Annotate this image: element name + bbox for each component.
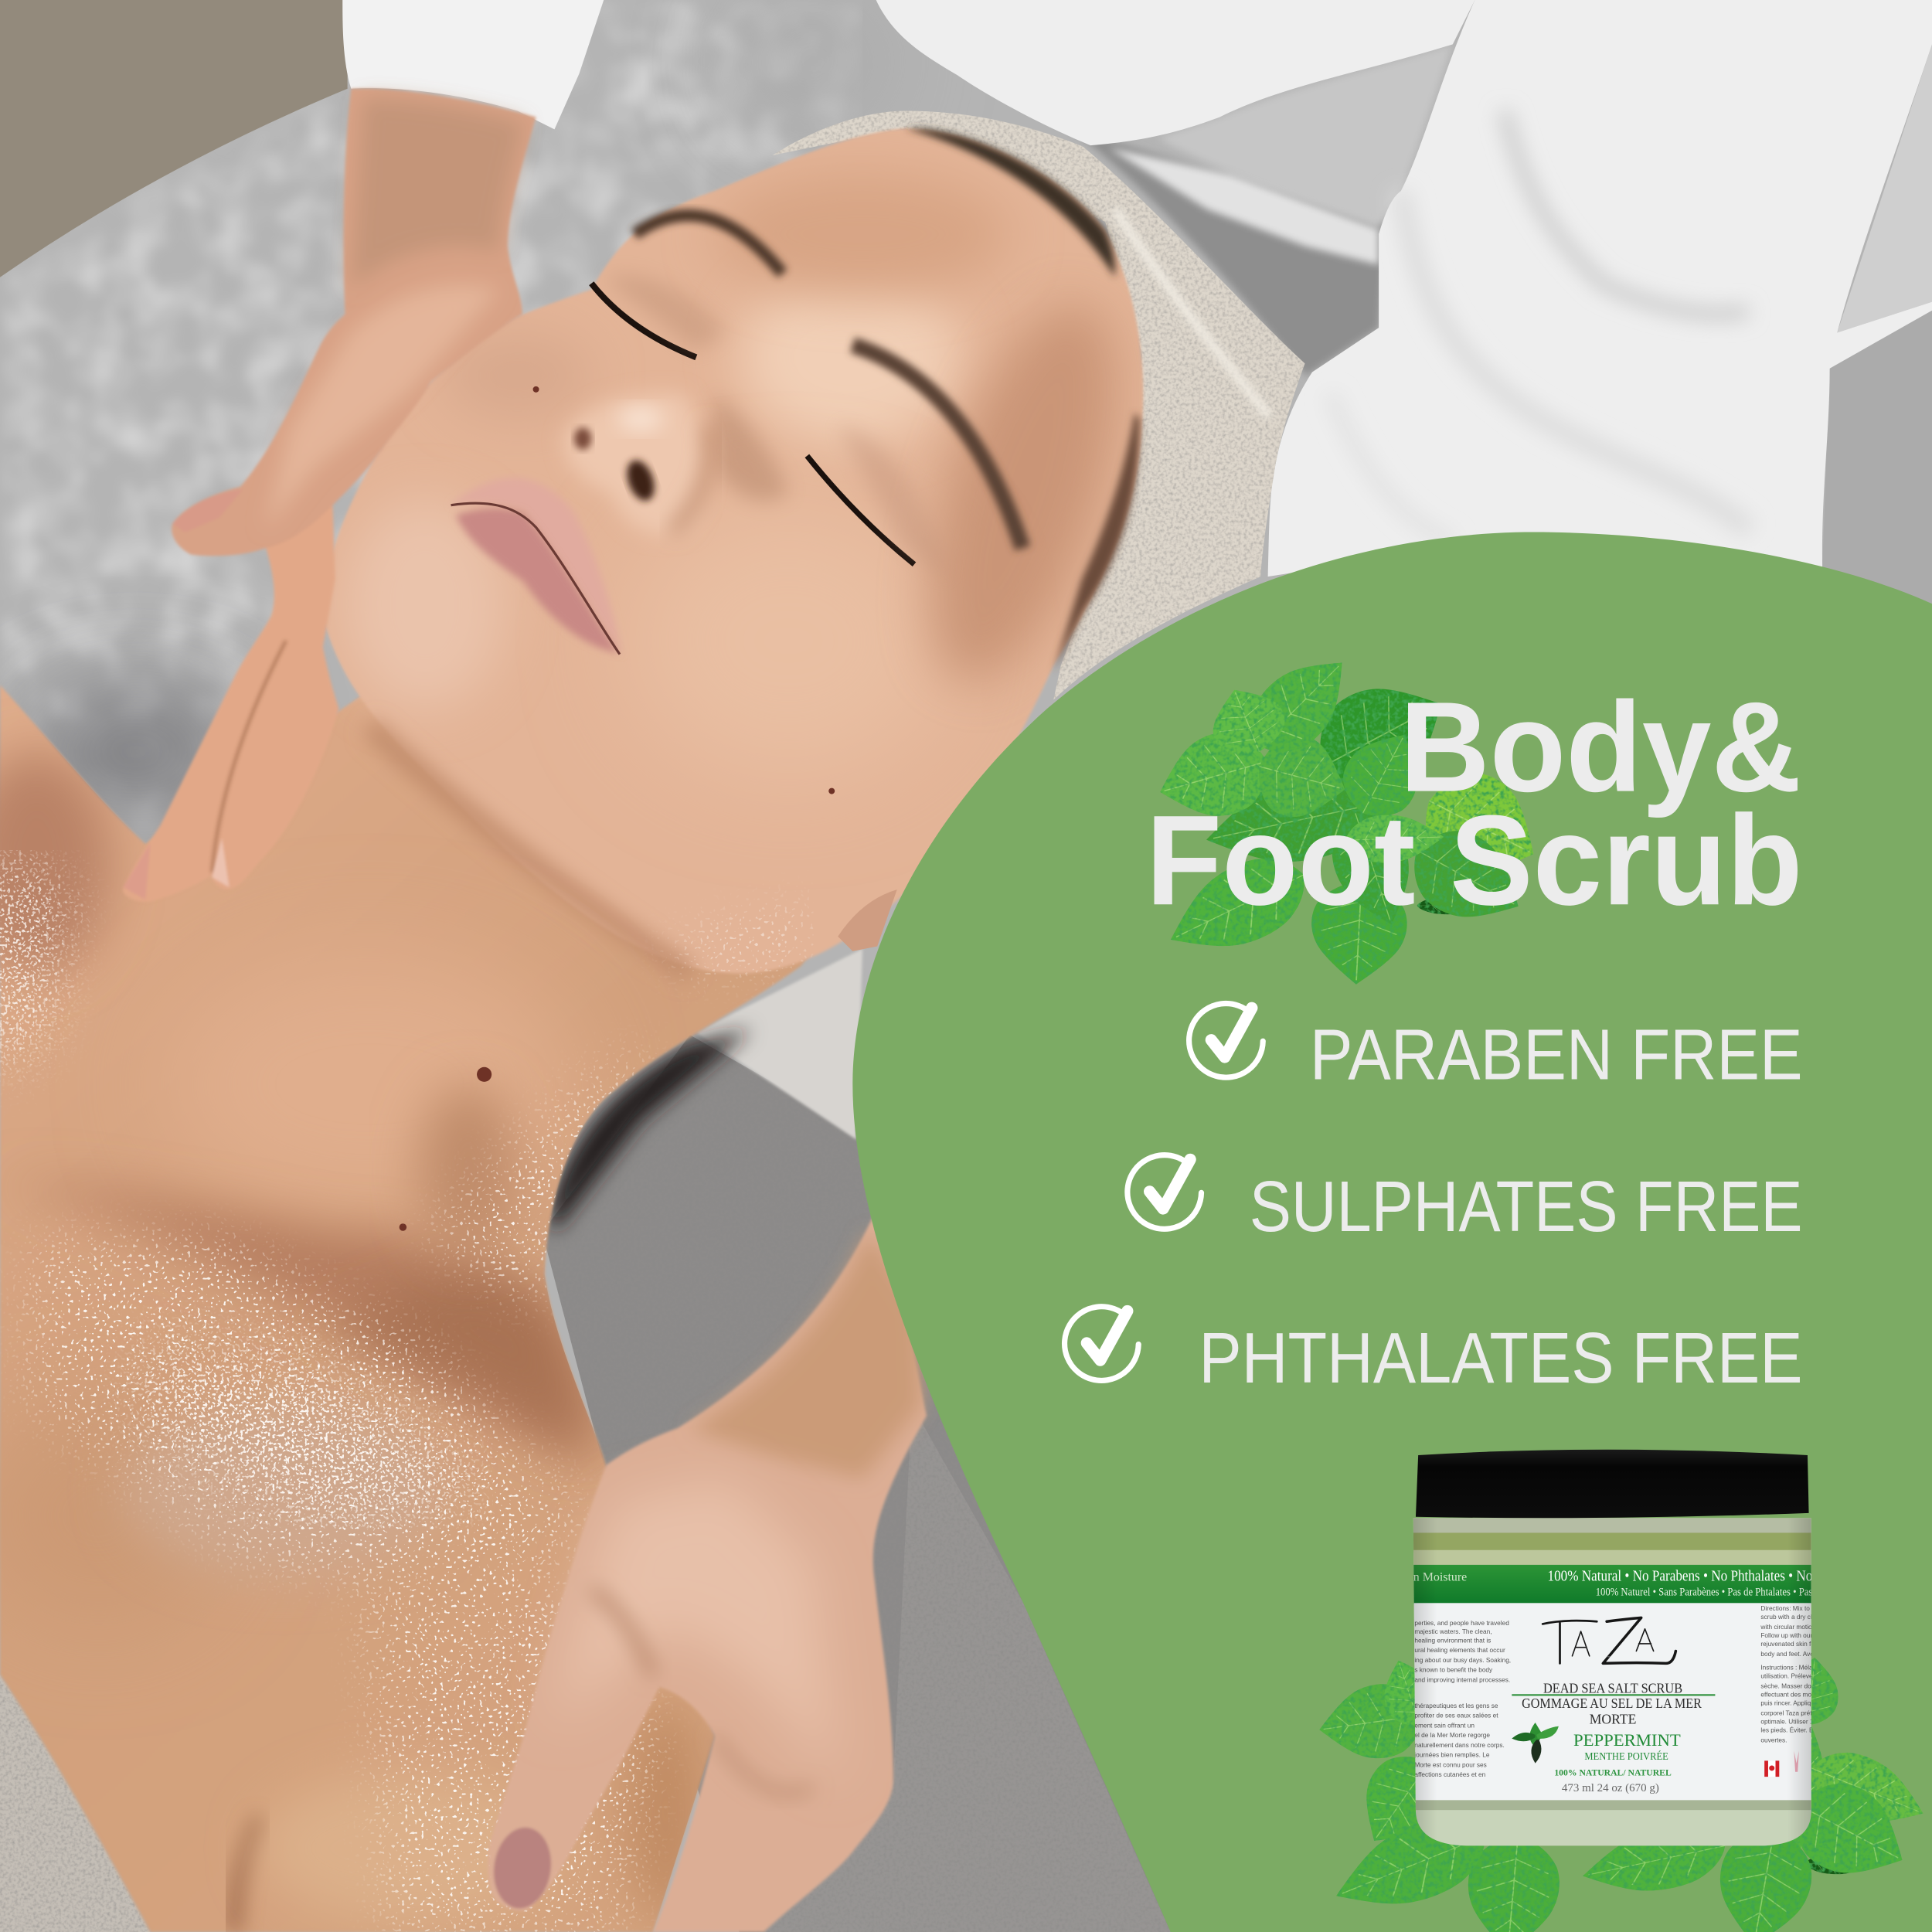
- band text left: n Moisture: [1413, 1571, 1467, 1584]
- left column copy: healing environment that is: [1414, 1636, 1491, 1644]
- coat: right grey backdrop: [1822, 44, 1932, 604]
- icon: canada flag: [1764, 1760, 1779, 1777]
- towel: mottling: [0, 0, 862, 850]
- label: PARABEN FREE: [1310, 1015, 1803, 1095]
- band text line two: 100% Naturel • Sans Parabènes • Pas de Phtalates • Pas: [1596, 1587, 1813, 1599]
- right column copy: with circular motion after bathing.: [1760, 1623, 1855, 1631]
- claim: phthalates free: [1065, 1307, 1803, 1398]
- icon: cruelty free rabbit: [1794, 1751, 1799, 1772]
- claim: paraben free: [1189, 1004, 1803, 1095]
- icon: check circle: [1189, 1004, 1263, 1077]
- jar edge shading: [1413, 1518, 1811, 1849]
- left column copy: s known to benefit the body: [1414, 1666, 1493, 1674]
- white label: [1413, 1603, 1811, 1800]
- product name french: GOMMAGE AU SEL DE LA MER: [1522, 1696, 1702, 1711]
- divider: [1512, 1694, 1715, 1696]
- left column copy: thérapeutiques et les gens se: [1414, 1702, 1498, 1709]
- forearm shade: [690, 1232, 922, 1478]
- flavor name french: MENTHE POIVRÉE: [1584, 1750, 1668, 1762]
- left column copy: ing about our busy days. Soaking,: [1414, 1656, 1511, 1664]
- towel under head: [696, 949, 862, 1140]
- left column copy: ement sain offrant un: [1414, 1721, 1475, 1729]
- panel: green curved background: [852, 532, 1932, 1932]
- label: SULPHATES FREE: [1250, 1166, 1803, 1247]
- claim: sulphates free: [1128, 1155, 1803, 1247]
- product name french second line: MORTE: [1590, 1712, 1636, 1727]
- lid: [1416, 1450, 1809, 1518]
- right column copy: sèche. Masser doucement le gommage: [1760, 1682, 1873, 1689]
- salt grains: [0, 850, 813, 1932]
- right eye: [807, 456, 914, 564]
- net weight: 473 ml 24 oz (670 g): [1562, 1782, 1659, 1794]
- fingernail thumb: [172, 489, 243, 532]
- left column copy: perties, and people have traveled: [1414, 1619, 1509, 1627]
- bottom scrub grain shading: [1413, 1800, 1811, 1810]
- right column copy: rejuvenated skin for optimum results: [1760, 1640, 1863, 1648]
- left brow: [634, 216, 782, 274]
- right column copy: effectuant des mouvements circulaires: [1760, 1690, 1870, 1698]
- headband: [773, 111, 1304, 700]
- backdrop: beige floor: [0, 0, 348, 277]
- right column copy: les pieds. Éviter. Exfoliant sur votre: [1760, 1726, 1861, 1734]
- ear: [838, 889, 897, 951]
- coat: main body: [1268, 0, 1932, 577]
- right brow: [852, 345, 1022, 549]
- towel: lower grey: [543, 1035, 1171, 1932]
- jar body: [1413, 1518, 1811, 1845]
- thumb highlight: [265, 285, 499, 530]
- body: neck, chest and shoulder: [0, 685, 862, 1932]
- nose: [564, 393, 710, 535]
- coat: dark fold shadow: [1072, 129, 1386, 376]
- right column copy: ouvertes.: [1760, 1736, 1787, 1743]
- skin shading: [0, 172, 1154, 1932]
- hand shading: [554, 1478, 838, 1787]
- masseuse upper hand: [123, 89, 536, 902]
- wrist and thumb: [172, 89, 536, 556]
- flavor name: PEPPERMINT: [1573, 1730, 1681, 1750]
- headband fold: [1115, 209, 1269, 417]
- right column copy: corporel Taza préfere sur une peau: [1760, 1709, 1861, 1716]
- wrist shade: [351, 99, 524, 290]
- right column copy: body and feet. Avoid using on open: [1760, 1650, 1861, 1658]
- right column copy: scrub with a dry clean spoon. Gently: [1760, 1613, 1865, 1621]
- right column copy: optimale. Utiliser 1 à 2 fois par sem: [1760, 1718, 1861, 1726]
- title line two: Foot Scrub: [1146, 789, 1803, 932]
- left column copy: affections cutanées et en: [1414, 1770, 1486, 1778]
- masseuse lower arm and hand: [488, 1213, 927, 1932]
- right column copy: puis rincer. Appliquez ensuite notre: [1760, 1699, 1860, 1707]
- salt grains: denser core: [0, 850, 493, 1528]
- towel: wrap at bottom left: [0, 1675, 151, 1932]
- hair: [906, 128, 1140, 672]
- towel: soft shading: [25, 0, 887, 813]
- face: [323, 128, 1143, 974]
- right column copy: Follow up with our favorite Taza oil: [1760, 1631, 1859, 1639]
- fingernail: [488, 1824, 556, 1912]
- brand logo: [1543, 1617, 1675, 1663]
- mint leaves around the jar: [1315, 1652, 1932, 1932]
- towel: lower right lit: [764, 1405, 1171, 1932]
- label: PHTHALATES FREE: [1199, 1318, 1803, 1398]
- armpit shadow: [549, 1029, 752, 1232]
- coat: grey inner fold: [1158, 44, 1453, 228]
- product jar: [1413, 1450, 1811, 1845]
- right column copy: [1760, 1604, 1873, 1743]
- fingers on neck: [123, 505, 338, 902]
- left column copy: journées bien remplies. Le: [1413, 1751, 1490, 1759]
- jar contents: [1413, 1518, 1811, 1839]
- left column copy: [1413, 1619, 1511, 1778]
- hidden logo wordmark: TAZA: [1607, 1655, 1611, 1658]
- icon: check circle: [1128, 1155, 1202, 1229]
- eyelids and sockets: [604, 275, 949, 579]
- right column copy: utilisation. Prélever le gommage: [1760, 1672, 1852, 1680]
- coat: upper sleeve: [876, 0, 1475, 145]
- title line one: Body&: [1400, 676, 1801, 819]
- left column copy: profiter de ses eaux salées et: [1414, 1712, 1498, 1719]
- product name english: DEAD SEA SALT SCRUB: [1543, 1681, 1682, 1696]
- finger crease: [212, 641, 286, 872]
- left column copy: ural healing elements that occur: [1414, 1646, 1505, 1654]
- salt scatter: [0, 850, 813, 1932]
- natural claim: 100% NATURAL/ NATUREL: [1554, 1767, 1672, 1778]
- coat: folds: [1331, 111, 1750, 543]
- icon: mint leaf cluster behind title: [1148, 638, 1556, 987]
- right column copy: Directions: Mix to incorporate oils.: [1760, 1604, 1857, 1612]
- icon: check circle: [1065, 1307, 1138, 1380]
- moles: [400, 386, 835, 1231]
- left column copy: majestic waters. The clean,: [1414, 1628, 1492, 1635]
- left column copy: Morte est connu pour ses: [1414, 1760, 1487, 1768]
- lips: [450, 478, 622, 655]
- left column copy: and improving internal processes.: [1414, 1675, 1510, 1683]
- left column copy: naturellement dans notre corps.: [1414, 1741, 1505, 1749]
- band text line one: 100% Natural • No Parabens • No Phthalates • No: [1548, 1568, 1812, 1585]
- left eye: [591, 284, 696, 357]
- title: [1146, 676, 1803, 932]
- icon: small mint sprig: [1512, 1723, 1559, 1764]
- label band: [1413, 1565, 1811, 1604]
- fingernails lower: [123, 843, 151, 900]
- coat: small white tab: [1109, 148, 1379, 265]
- left column copy: el de la Mer Morte regorge: [1414, 1731, 1490, 1739]
- coat: cuff: [342, 0, 604, 129]
- right column copy: Instructions : Mélangez pour incorporer: [1760, 1663, 1872, 1671]
